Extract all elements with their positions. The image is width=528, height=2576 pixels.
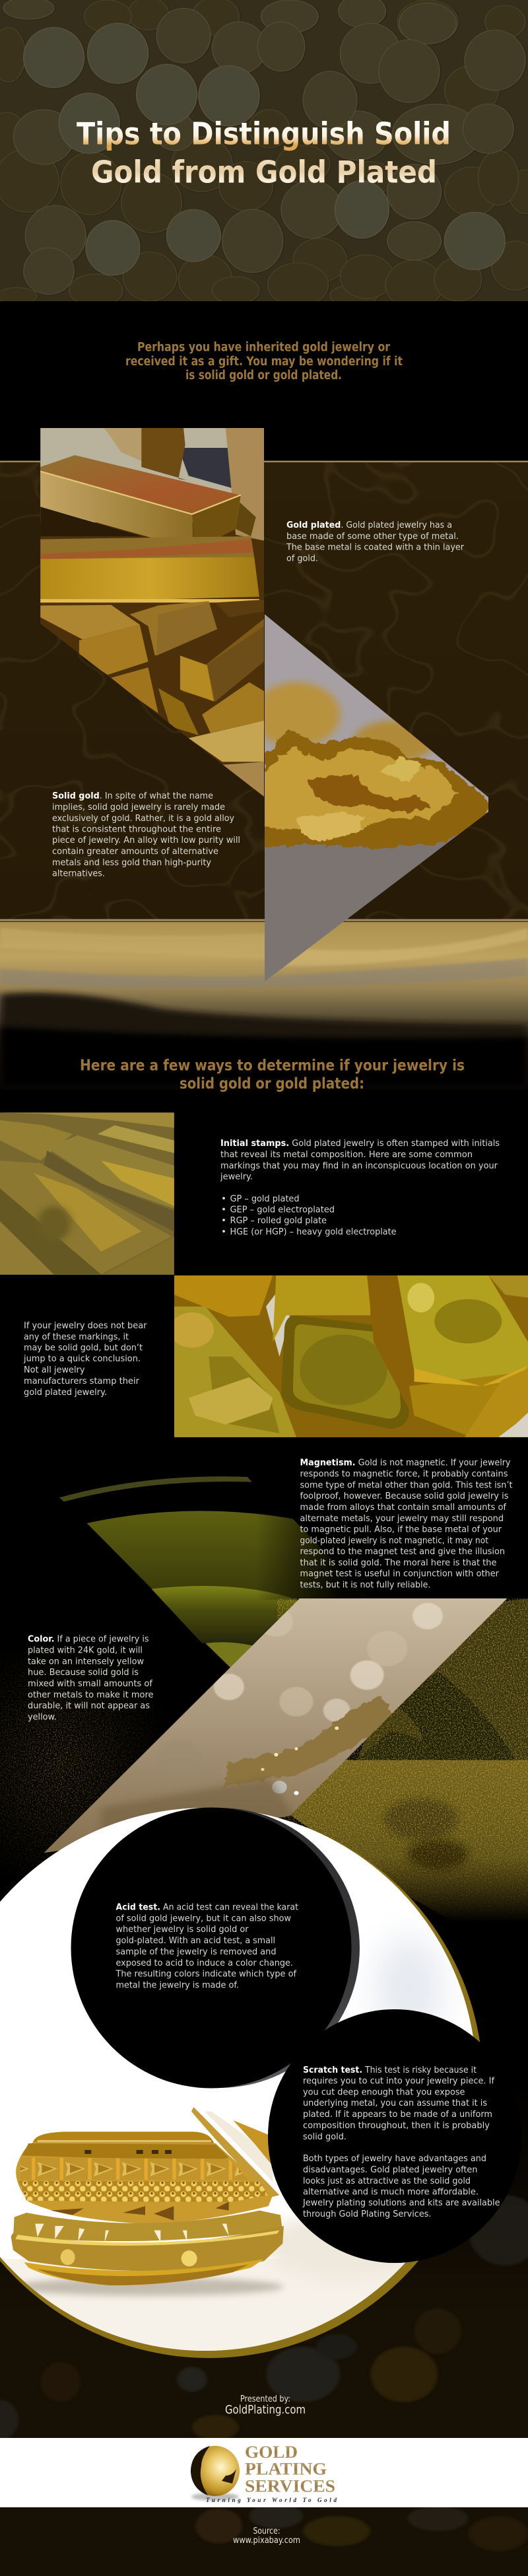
list: common markings: HGE (or HGP) – heavy gold electroplate — [230, 1227, 396, 1237]
text: magnetism: respond to the magnet test and give the illusion — [300, 1546, 505, 1557]
intro text: received it as a gift. You may be wondering if it — [125, 355, 403, 369]
text: acid test: sample of the jewelry is removed and — [116, 1947, 276, 1957]
list: common markings: • — [221, 1227, 226, 1237]
text: solid gold: exclusively of gold. Rather, it is a gold alloy — [52, 813, 234, 824]
source: www.pixabay.com — [233, 2535, 300, 2546]
text: initial stamps: markings that you may find in an inconspicuous location on your — [220, 1161, 498, 1171]
text: no markings: jump to a quick conclusion. — [23, 1353, 141, 1364]
text: magnetism: magnet test is useful in conjunction with other — [300, 1568, 499, 1579]
text: magnetism: made from alloys that contain small amounts of — [300, 1502, 507, 1513]
text: magnetism: that it is solid gold. The moral here is that the — [300, 1557, 496, 1568]
text: color: other metals to make it more — [28, 1690, 153, 1700]
text: solid gold: that is consistent throughout the entire — [52, 824, 221, 835]
text: magnetism — [300, 1457, 512, 1591]
text: gold plated: The base metal is coated with a thin layer — [286, 542, 464, 552]
logo: gold plating services — [191, 2443, 337, 2503]
logo: gold plating services: SERVICES — [245, 2477, 335, 2495]
grey crescent behind acid circle — [80, 1808, 360, 2088]
list: common markings: • — [221, 1205, 226, 1215]
heading: ways to determine: solid gold or gold plated: — [180, 1075, 364, 1092]
logo: gold plating services: GOLD — [245, 2443, 298, 2462]
text: no markings: gold plated jewelry. — [24, 1387, 107, 1398]
text: acid test: Acid test. An acid test can reveal the karat — [116, 1902, 298, 1913]
intro text — [125, 341, 403, 382]
text: magnetism: tests, but it is not fully reliable. — [300, 1580, 430, 1591]
footer dark bokeh background — [0, 2081, 528, 2576]
presented by — [225, 2394, 306, 2417]
text: magnetism: gold-plated jewelry is not magnetic, it may not — [300, 1535, 488, 1546]
text: magnetism: to magnetic pull. Also, if the base metal of your — [300, 1524, 502, 1535]
title: Tips to Distinguish Solid — [77, 116, 451, 152]
text: scratch test — [302, 2065, 500, 2219]
bangles — [11, 2107, 284, 2285]
gold dust texture — [0, 1598, 528, 1925]
image: gold ingots — [0, 1112, 174, 1277]
image: gold bokeh parallelogram — [34, 1598, 512, 1864]
text: color: take on an intensely yellow — [28, 1657, 144, 1667]
heading: ways to determine — [80, 1057, 465, 1092]
white circle with bangles — [0, 1803, 482, 2358]
list: common markings — [221, 1194, 396, 1237]
text: no markings: may be solid gold, but don’t — [24, 1342, 143, 1353]
text: scratch test: Both types of jewelry have advantages and — [303, 2153, 486, 2164]
image: gold nugget — [265, 614, 488, 982]
text: solid gold: piece of jewelry. An alloy with low purity will — [52, 835, 240, 845]
text: magnetism: foolproof, however. Because solid gold jewelry is — [300, 1491, 508, 1501]
text: scratch test: you cut deep enough that you expose — [303, 2087, 465, 2098]
text: magnetism: Magnetism. Gold is not magnetic. If your jewelry — [300, 1457, 511, 1468]
text: solid gold: contain greater amounts of alternative — [52, 846, 218, 857]
text: magnetism: some type of metal other than gold. This test isn’t — [300, 1480, 512, 1490]
wave band — [0, 922, 528, 1087]
text: acid test: whether jewelry is solid gold or — [116, 1924, 249, 1935]
text: scratch test: composition throughout, then it is probably — [303, 2120, 490, 2131]
text: solid gold: Solid gold. In spite of what the name — [52, 791, 213, 801]
text: gold plated: base made of some other type of metal. — [286, 531, 459, 542]
text: scratch test: disadvantages. Gold plated jewelry often — [303, 2165, 478, 2175]
title: Gold from Gold Plated — [91, 155, 437, 190]
text: color — [28, 1634, 153, 1723]
list: common markings: GP – gold plated — [230, 1194, 300, 1204]
black circle: scratch test — [268, 2009, 521, 2263]
text: magnetism: responds to magnetic force, it probably contains — [300, 1469, 508, 1480]
text: color: durable, it will not appear as — [28, 1700, 150, 1711]
text: no markings — [23, 1320, 147, 1398]
text: scratch test: plated. If it appears to be made of a uniform — [303, 2109, 492, 2120]
text: acid test: The resulting colors indicate which type of — [116, 1968, 297, 1979]
text: acid test: gold-plated. With an acid test, a small — [116, 1935, 275, 1946]
heading: ways to determine: Here are a few ways to determine if your jewelry is — [80, 1057, 465, 1074]
image: dark olive vinyl arcs — [59, 1476, 528, 1668]
text: color: mixed with small amounts of — [28, 1678, 153, 1689]
text: magnetism: alternate metals, your jewelry may still respond — [300, 1513, 504, 1524]
list: common markings: • — [221, 1215, 226, 1226]
text: scratch test: underlying metal, you can assume that it is — [303, 2098, 487, 2108]
logo: gold plating services: PLATING — [245, 2460, 327, 2478]
source: Source: — [253, 2526, 280, 2536]
text: gold plated: Gold plated. Gold plated jewelry has a — [286, 520, 452, 530]
text: solid gold: implies, solid gold jewelry is rarely made — [52, 802, 225, 812]
text: scratch test: through Gold Plating Services. — [303, 2209, 432, 2219]
text: gold plated: of gold. — [286, 554, 318, 564]
image: stacked gold bars — [40, 428, 264, 800]
text: scratch test: Scratch test. This test is risky because it — [303, 2065, 477, 2075]
text: scratch test: requires you to cut into your jewelry piece. If — [303, 2075, 495, 2086]
text: no markings: If your jewelry does not bear — [24, 1320, 147, 1331]
text: solid gold: alternatives. — [52, 868, 105, 878]
intro text: is solid gold or gold plated. — [185, 369, 342, 382]
text: initial stamps: Initial stamps. Gold plated jewelry is often stamped with initials — [220, 1138, 500, 1149]
header: coin background — [0, 0, 528, 309]
text: acid test: metal the jewelry is made of. — [116, 1980, 239, 1991]
text: acid test — [116, 1902, 298, 1991]
text: no markings: Not all jewelry — [24, 1365, 84, 1375]
text: gold plated — [286, 520, 464, 564]
gold rim of white circle — [0, 1810, 483, 2358]
text: solid gold: metals and less gold than high-purity — [52, 857, 211, 868]
text: initial stamps: that reveal its metal composition. Here are some common — [220, 1149, 473, 1160]
panel: leather background — [0, 461, 528, 922]
text: scratch test: solid gold. — [303, 2131, 346, 2142]
text: no markings: any of these markings, it — [24, 1332, 129, 1342]
text: scratch test: Jewelry plating solutions and kits are available — [302, 2198, 500, 2208]
presented by: GoldPlating.com — [225, 2403, 306, 2417]
text: scratch test: alternative and is much more affordable. — [303, 2186, 478, 2197]
list: common markings: GEP – gold electroplated — [230, 1205, 335, 1215]
text: solid gold — [52, 791, 240, 878]
text: color: Color. If a piece of jewelry is — [28, 1634, 149, 1645]
title — [77, 116, 451, 190]
list: common markings: • — [221, 1194, 226, 1204]
text: no markings: manufacturers stamp their — [24, 1376, 139, 1386]
logo: gold plating services: Turning Your World To Gold — [206, 2497, 337, 2503]
text: color: yellow. — [28, 1712, 57, 1723]
intro text: Perhaps you have inherited gold jewelry or — [137, 341, 391, 354]
text: initial stamps: jewelry. — [220, 1172, 253, 1182]
text: acid test: exposed to acid to induce a color change. — [116, 1958, 293, 1968]
list: common markings: RGP – rolled gold plate — [230, 1215, 327, 1226]
black circle: acid test — [71, 1807, 351, 2089]
text: scratch test: looks just as attractive as the solid gold — [303, 2176, 471, 2186]
image: stamped gold bars — [170, 1275, 528, 1437]
presented by: Presented by: — [240, 2394, 290, 2404]
source — [233, 2526, 300, 2546]
white logo band — [0, 2438, 528, 2507]
text: acid test: of solid gold jewelry, but it can also show — [116, 1913, 291, 1923]
text: color: plated with 24K gold, it will — [28, 1645, 143, 1655]
text: initial stamps — [220, 1138, 500, 1182]
text: color: hue. Because solid gold is — [28, 1667, 139, 1678]
